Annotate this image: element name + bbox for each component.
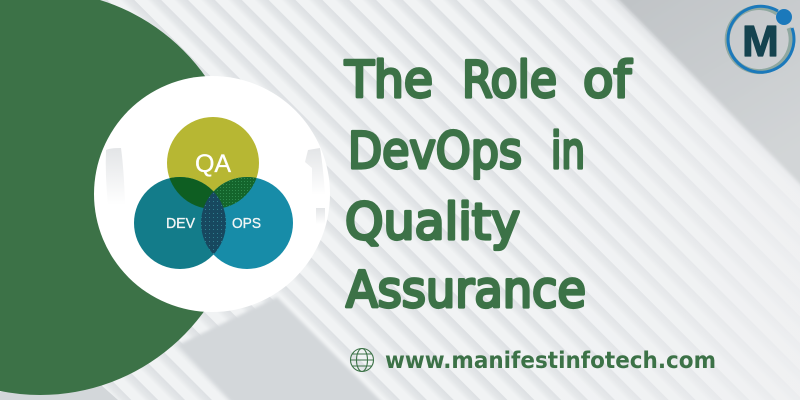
- title: Assurance: [346, 261, 586, 319]
- logo: [727, 6, 794, 72]
- title: Quality: [345, 193, 520, 251]
- overlap QA and DEV: [170, 177, 214, 208]
- title: of: [583, 51, 632, 109]
- overlap DEV and OPS: [201, 192, 226, 254]
- DEV label: DEV: [166, 215, 195, 232]
- title: in: [551, 122, 585, 180]
- venn diagram: [134, 117, 293, 269]
- title: [344, 51, 632, 319]
- OPS label: OPS: [232, 215, 261, 232]
- icon: globe: [350, 348, 374, 372]
- logo letter M: M: [742, 17, 779, 66]
- title: Role: [462, 51, 557, 109]
- title: DevOps: [348, 122, 522, 180]
- OPS circle: [201, 177, 293, 269]
- green half circle: [0, 0, 242, 395]
- DEV circle: [134, 177, 226, 269]
- white circle panel: [94, 76, 330, 312]
- website url: www.manifestinfotech.com: [385, 348, 716, 374]
- title: The: [344, 51, 433, 109]
- overlap QA and OPS: [206, 177, 256, 208]
- QA label: QA: [195, 150, 231, 178]
- QA circle: [167, 117, 259, 209]
